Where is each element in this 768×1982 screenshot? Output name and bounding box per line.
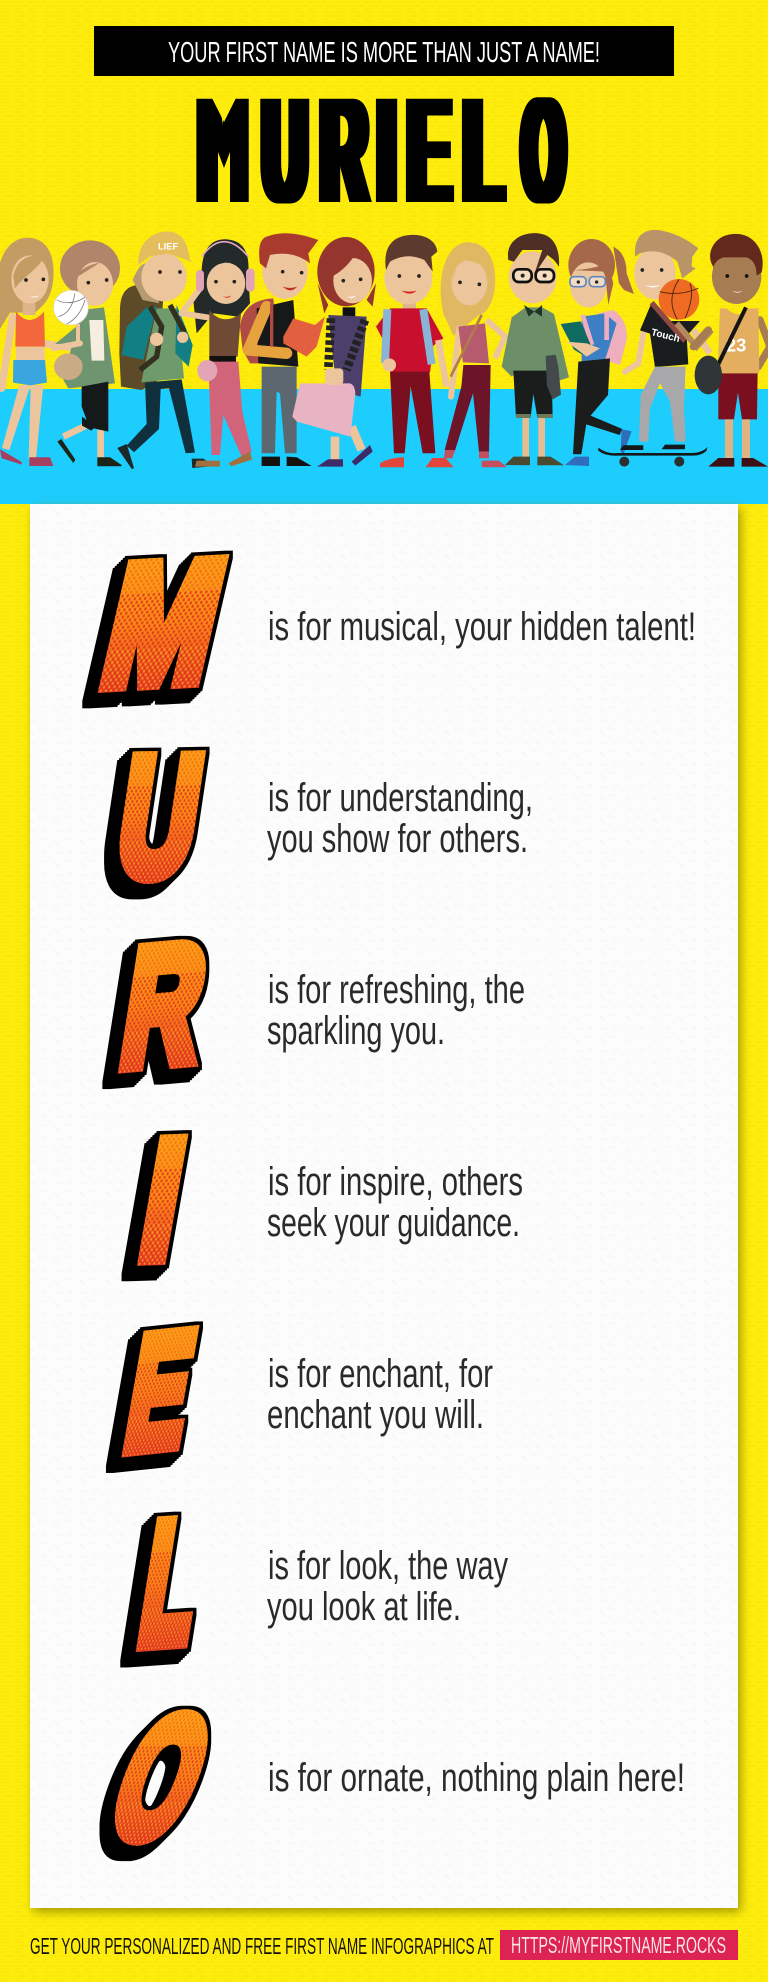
row I: text: is for inspire, others: [268, 1160, 523, 1204]
person 4: woman with black hair and pink headphones: [182, 239, 255, 467]
person 11: skateboarder in black tee with basketball: [598, 230, 712, 467]
row L: text: is for look, the way: [268, 1544, 508, 1588]
panel: white card: [30, 504, 741, 1912]
title: MURIELO: U: [263, 67, 307, 235]
row U: text: is for understanding,: [268, 776, 533, 820]
row R: text: [267, 968, 525, 1053]
row M: comic letter: M: [89, 526, 239, 722]
row L: text: [267, 1544, 508, 1629]
row O: comic letter: O: [90, 1682, 233, 1872]
title: MURIELO: [198, 66, 565, 235]
title: MURIELO: M: [198, 67, 247, 235]
person 2: woman in green jacket with volleyball: [53, 240, 122, 466]
person 11: skateboarder in black tee with basketball: Touch: [650, 327, 681, 345]
row U: text: [267, 776, 533, 861]
row L: text: you look at life.: [267, 1585, 461, 1629]
row E: text: is for enchant, for: [268, 1352, 493, 1396]
illustration: blue floor band: [0, 389, 768, 504]
row R: comic letter: R: [111, 908, 217, 1102]
row E: text: [267, 1352, 493, 1437]
title: MURIELO: R: [321, 67, 367, 234]
top banner: [94, 26, 674, 76]
person 12: man in yellow jersey with shoulder bag: 23: [726, 335, 746, 356]
person 1: woman in orange top: [0, 238, 77, 466]
row R: text: sparkling you.: [267, 1009, 445, 1053]
row E: comic letter: E: [115, 1297, 206, 1484]
title: MURIELO: I: [378, 67, 396, 234]
row U: text: you show for others.: [267, 817, 528, 861]
title: MURIELO: O: [522, 66, 565, 234]
row R: text: is for refreshing, the: [268, 968, 525, 1012]
person 3: man with yellow cap and large backpack: LIEF: [158, 241, 178, 251]
person 8: woman with blonde hair and pink top: [441, 242, 507, 467]
row E: text: enchant you will.: [267, 1393, 484, 1437]
person 9: man with glasses, green sweater and laptop: [502, 233, 569, 465]
row L: comic letter: L: [130, 1485, 211, 1679]
title: MURIELO: L: [464, 67, 503, 234]
person 10: woman with ponytail, tablet and pink backpack: [561, 239, 634, 466]
row I: comic letter: I: [130, 1106, 196, 1295]
title: MURIELO: E: [408, 67, 451, 234]
person 6: woman with red hair and pink bag: [292, 237, 376, 467]
row I: text: seek your guidance.: [267, 1201, 520, 1245]
person 12: man in yellow jersey with shoulder bag: [693, 234, 768, 467]
person 3: man with yellow cap and large backpack: [117, 231, 214, 469]
person 5: man with orange book: [240, 233, 325, 466]
illustration: group of twelve young people: [0, 230, 768, 469]
row I: text: [267, 1160, 523, 1245]
person 7: man in red shirt with blue backpack straps: [376, 235, 454, 467]
row U: comic letter: U: [108, 722, 212, 911]
